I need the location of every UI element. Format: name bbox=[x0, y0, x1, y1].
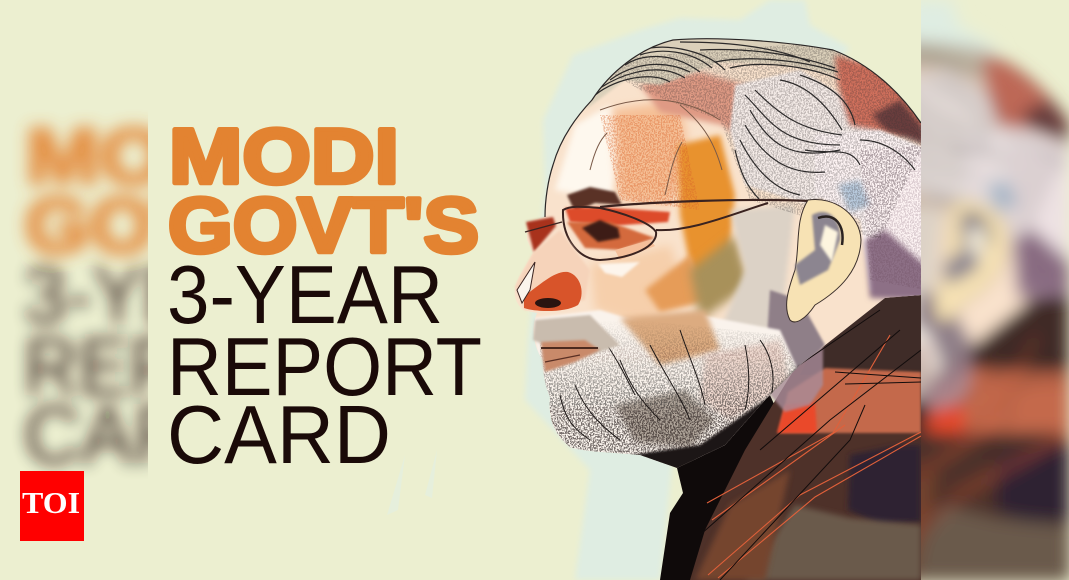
headline line: 3-YEAR: 3-YEAR bbox=[167, 248, 443, 341]
beard base bbox=[533, 310, 800, 470]
headline line: MODI: MODI bbox=[169, 112, 399, 200]
beard grain bbox=[540, 320, 800, 470]
far lens bbox=[526, 217, 556, 252]
grain over forehead bbox=[600, 115, 700, 210]
orange band bbox=[778, 368, 921, 433]
forehead pink patch bbox=[639, 70, 743, 134]
jacket lines bbox=[707, 335, 921, 578]
logo text: TOI bbox=[22, 485, 80, 520]
hair top bbox=[585, 36, 860, 110]
head bbox=[510, 30, 930, 480]
portrait illustration bbox=[387, 0, 930, 580]
blurred left strip: repeated headline: REPORT bbox=[24, 320, 339, 413]
TOI logo bbox=[20, 471, 84, 541]
red crown bbox=[835, 55, 930, 135]
blurred left strip: repeated headline bbox=[14, 114, 148, 474]
blurred left strip: repeated headline: GOVT'S bbox=[25, 181, 336, 269]
moustache bbox=[533, 315, 620, 355]
dark upper shoulder bbox=[800, 295, 921, 375]
jacket bbox=[640, 295, 921, 580]
grain over nape bbox=[860, 145, 925, 290]
red eye shade bbox=[565, 207, 670, 226]
pale side stubble bbox=[720, 205, 795, 350]
cheek beard pink bbox=[700, 340, 790, 420]
brush streaks bbox=[387, 450, 437, 515]
eye surround bbox=[567, 222, 655, 250]
hair strokes bbox=[592, 42, 915, 200]
nose bbox=[515, 230, 590, 311]
glasses bbox=[525, 200, 810, 260]
headline bbox=[167, 112, 482, 481]
lower rust wash bbox=[695, 470, 790, 580]
nose bridge bbox=[515, 230, 590, 310]
beard hatch strokes bbox=[560, 330, 773, 440]
dark crown patch bbox=[872, 100, 925, 145]
lilac translucent panel bbox=[765, 300, 823, 412]
nostril bbox=[535, 298, 561, 308]
headline line: CARD: CARD bbox=[167, 388, 391, 481]
dark shadow patch bbox=[848, 445, 921, 525]
ear bbox=[787, 199, 861, 322]
ear fold bbox=[818, 217, 843, 245]
white back hair bbox=[815, 130, 930, 300]
lower grey-brown wash bbox=[745, 505, 921, 580]
throat shadow bbox=[628, 364, 800, 468]
eye bbox=[582, 220, 620, 242]
jacket base bbox=[690, 295, 921, 580]
under-eye bbox=[615, 240, 655, 260]
headline line: GOVT'S: GOVT'S bbox=[168, 181, 479, 269]
lips bbox=[541, 340, 600, 372]
forehead peach bbox=[612, 100, 690, 205]
grain over hair bbox=[590, 40, 930, 240]
stubble tone bbox=[620, 310, 720, 365]
temple orange patch bbox=[678, 135, 735, 290]
ear shape bbox=[787, 199, 861, 322]
headline line: REPORT: REPORT bbox=[167, 320, 482, 413]
olive stubble bbox=[690, 235, 750, 320]
neck grey bbox=[765, 290, 825, 385]
side hair bbox=[730, 70, 880, 205]
head outline bbox=[545, 39, 921, 217]
nose highlight bbox=[517, 262, 535, 303]
eyebrow bbox=[567, 187, 622, 212]
watercolour wash behind head bbox=[525, 0, 850, 580]
blurred left strip: repeated headline: CARD bbox=[24, 388, 248, 481]
chin shadow bbox=[615, 390, 715, 448]
dark neck bbox=[640, 395, 790, 580]
ear light bbox=[820, 225, 838, 262]
nose tip bbox=[524, 272, 582, 311]
face lines bbox=[590, 100, 722, 195]
bright red patch bbox=[777, 402, 817, 433]
cheek bbox=[589, 244, 678, 318]
inner ear bbox=[795, 212, 840, 285]
purple nape bbox=[865, 230, 930, 300]
moustache and lips bbox=[533, 315, 620, 372]
skin base bbox=[510, 30, 930, 470]
blurred right strip: repeated portrait bbox=[921, 0, 1069, 580]
blurred left strip: repeated headline: MODI bbox=[26, 112, 256, 200]
blurred left strip: repeated headline: 3-YEAR bbox=[24, 248, 300, 341]
logo square bbox=[20, 471, 84, 541]
blue-grey sideburn tint bbox=[838, 180, 870, 212]
forehead highlight bbox=[554, 105, 618, 194]
